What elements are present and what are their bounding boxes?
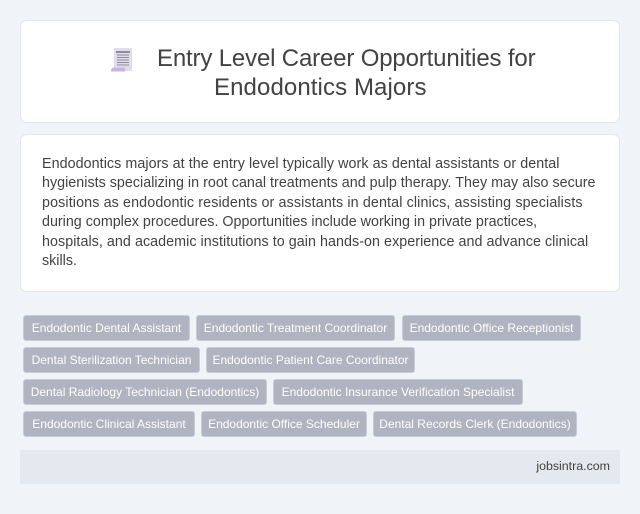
footer bar (20, 450, 620, 484)
title: Entry Level Career Opportunities for (157, 45, 535, 72)
tag (273, 379, 523, 405)
description text: hygienists specializing in root canal treatments and pulp therapy. They may also secure (42, 175, 596, 191)
tag: Endodontic Treatment Coordinator (204, 321, 387, 335)
tag: Endodontic Clinical Assistant (32, 417, 186, 431)
tag (23, 411, 195, 437)
description text: Endodontics majors at the entry level typically work as dental assistants or dental (42, 156, 560, 172)
tag: Dental Sterilization Technician (32, 353, 191, 367)
icon: document scroll (111, 48, 132, 72)
tag: Endodontic Office Receptionist (410, 321, 573, 335)
tag: Endodontic Insurance Verification Specialist (282, 385, 514, 399)
panel: description (20, 134, 620, 292)
tag (373, 411, 577, 437)
description text: positions as endodontic residents or assistants in dental clinics, assisting specialists (42, 195, 583, 211)
footer text: jobsintra.com (536, 459, 610, 473)
title (157, 45, 536, 101)
tag: Endodontic Dental Assistant (32, 321, 181, 335)
tag (23, 379, 267, 405)
description text: during complex procedures. Opportunities include working in private practices, (42, 214, 537, 230)
description text: skills. (42, 253, 77, 269)
panel: title header (20, 20, 620, 123)
tag: Endodontic Office Scheduler (208, 417, 360, 431)
tag (402, 315, 581, 341)
tag: Dental Radiology Technician (Endodontics) (31, 385, 259, 399)
tag (201, 411, 367, 437)
tag: Dental Records Clerk (Endodontics) (379, 417, 571, 431)
tags: job titles (23, 315, 581, 437)
tag (23, 347, 200, 373)
title: Endodontics Majors (214, 74, 427, 101)
description text (42, 156, 596, 269)
tag (206, 347, 415, 373)
tag (23, 315, 190, 341)
tag (196, 315, 395, 341)
tag: Endodontic Patient Care Coordinator (212, 353, 409, 367)
description text: hospitals, and academic institutions to gain hands-on experience and advance clinical (42, 234, 588, 250)
